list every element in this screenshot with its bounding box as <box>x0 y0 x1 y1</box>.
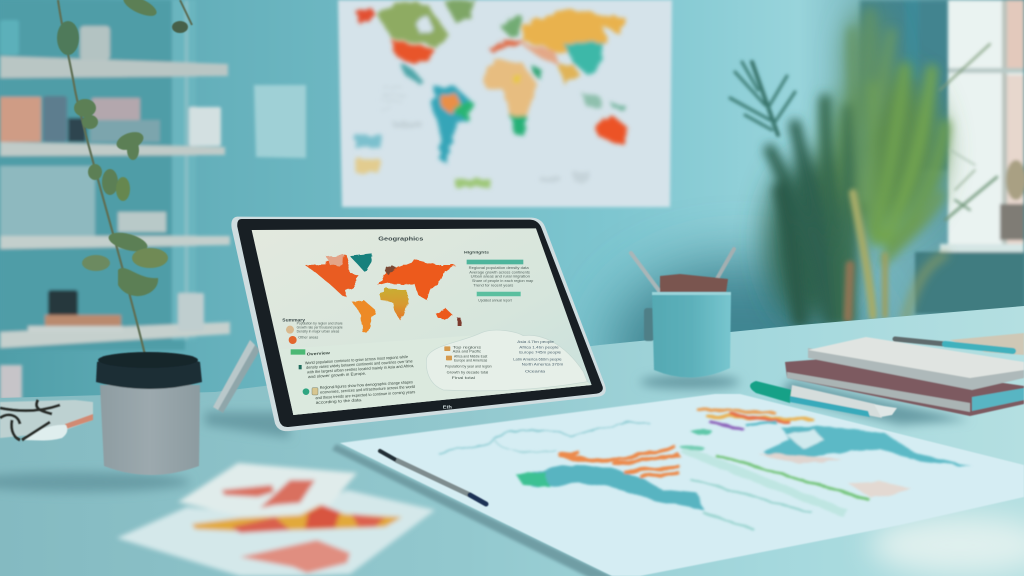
pen on paper <box>380 451 486 504</box>
mug body <box>652 293 731 378</box>
note under bar: Updated annual report <box>478 299 512 303</box>
palm fronds <box>770 12 945 320</box>
bubble text left: Top regions <box>453 345 482 349</box>
tablet silver edge <box>231 217 606 431</box>
window pot plant <box>1000 204 1024 240</box>
palm dark mass <box>766 10 943 325</box>
left legend: Other areas <box>298 335 319 339</box>
paper rainbow chart <box>698 410 813 429</box>
lower red chart <box>240 540 350 573</box>
paper curve outline <box>438 422 650 453</box>
paper green dots <box>691 429 712 434</box>
top shelf jar <box>0 20 19 55</box>
poster red USA <box>392 39 433 63</box>
shelf 3 <box>0 236 230 249</box>
poster Russia <box>523 8 627 53</box>
white book stack <box>118 212 166 232</box>
paper shadow <box>332 444 616 576</box>
glasses frame <box>0 400 60 440</box>
paper green end <box>514 472 549 487</box>
poster green Greenland <box>443 0 477 24</box>
bubble text right <box>513 340 564 373</box>
poster central America <box>400 62 425 85</box>
bubble text left: Final total <box>452 376 475 380</box>
right text block: Regional population density data <box>469 266 530 270</box>
lower left paragraph one: density varies widely between continents and countries over time <box>306 358 413 370</box>
lower box <box>0 365 22 400</box>
earbud shape <box>22 425 67 440</box>
shelf 1 <box>0 56 228 78</box>
plant leaves <box>57 0 188 296</box>
right text block: Trend for recent years <box>473 283 513 287</box>
bubble text left: Europe and Americas <box>454 359 488 363</box>
book stack <box>785 333 1024 416</box>
marker cap <box>750 381 792 403</box>
top book front <box>808 348 1024 390</box>
marker tip <box>874 404 897 417</box>
lower left paragraph two: economies, services and infrastructure across the world <box>320 384 415 395</box>
poster South America <box>431 85 473 163</box>
map South America <box>353 300 375 333</box>
small papers with charts <box>117 463 435 576</box>
poster SE Asia <box>582 93 603 110</box>
lower left paragraph two <box>315 379 416 405</box>
lower left paragraph one: with the largest urban centres located mainly in Asia and Africa, <box>307 363 414 375</box>
mug handle <box>644 308 654 341</box>
paper sheet <box>340 394 1024 576</box>
poster Europe <box>502 13 523 37</box>
lower left paragraph one: Overview <box>307 350 331 357</box>
bubble text left: Africa and Middle East <box>454 355 487 359</box>
tablet stand <box>213 340 260 413</box>
pink book stack <box>92 98 140 120</box>
left legend: Population by region and share <box>297 321 343 325</box>
map North America <box>305 255 360 297</box>
bubble text right: Latin America 660m people <box>513 358 562 362</box>
teal highlight bar two <box>477 292 521 296</box>
map Eurasia <box>378 260 455 300</box>
map Greenland <box>349 253 372 272</box>
map arctic islands <box>327 255 345 267</box>
lower left paragraph two: Regional figures show how demographic change shapes <box>320 379 413 390</box>
green tag <box>291 349 305 355</box>
top shelf pot <box>80 26 110 60</box>
palm thin fronds over window <box>940 44 997 220</box>
bubble panel <box>426 330 587 391</box>
white bottle <box>178 293 204 331</box>
pen on book <box>895 339 945 344</box>
lower left paragraph one: and slower growth in Europe. <box>308 371 366 379</box>
left legend: Growth rate per thousand people <box>297 325 343 329</box>
pen mug <box>631 249 734 378</box>
lower book cover <box>785 358 1024 416</box>
cup body <box>100 385 200 475</box>
poster middle east <box>520 43 560 65</box>
cup lid <box>96 354 202 389</box>
wall shadow near desk <box>610 260 870 440</box>
orange framed print <box>0 97 41 142</box>
screen title: Geographics <box>378 236 423 242</box>
paper orange stripes <box>560 447 680 477</box>
left legend <box>282 318 343 344</box>
left cup with lid <box>96 352 202 475</box>
window <box>915 0 1024 314</box>
paper blue landmass upper <box>763 427 972 467</box>
icon dots <box>299 365 302 369</box>
left legend: Summary <box>282 318 306 323</box>
glasses and notebook <box>0 400 93 440</box>
palm left frond <box>730 62 795 135</box>
plant stem <box>58 0 145 355</box>
wall background <box>0 0 1024 400</box>
tablet screen <box>252 228 592 415</box>
poster China <box>563 42 603 75</box>
right text block: Urban areas and rural migration <box>471 275 530 279</box>
pink brick panes <box>1007 0 1024 68</box>
top right heading: Highlights <box>464 250 490 255</box>
paper green line long <box>684 450 846 513</box>
large paper map <box>332 394 1024 576</box>
dark wall column <box>860 0 950 170</box>
spoon left <box>631 253 660 292</box>
poster green Canada <box>377 2 450 47</box>
map Scandinavia <box>384 265 397 275</box>
yellow red chart <box>192 505 402 531</box>
red chart <box>222 485 274 497</box>
lower wall under window <box>915 252 1024 314</box>
speckled panel <box>0 166 95 236</box>
right text block: Share of people in each region map <box>472 279 533 283</box>
tablet <box>231 217 606 431</box>
left legend: Density in major urban areas <box>297 329 340 333</box>
spoon right <box>706 249 734 298</box>
bubble text left: Asia and Pacific <box>453 349 481 353</box>
right text block: Average growth across continents <box>469 270 530 274</box>
bubble text right: Asia 4.7bn people <box>517 340 554 344</box>
wall poster: world map <box>338 0 672 207</box>
palm stems <box>848 193 885 318</box>
map dark island <box>457 318 461 325</box>
tablet black bezel <box>237 219 603 427</box>
wall note <box>254 85 306 158</box>
lower panel <box>279 333 592 415</box>
bubble text left <box>444 345 492 380</box>
poster Australia <box>597 116 628 147</box>
shelf 2 <box>0 142 225 156</box>
back paper <box>178 463 357 517</box>
paper blue landmass lower <box>532 463 704 510</box>
bubble text right: Africa 1.4bn people <box>519 345 559 349</box>
bubble text left: Population by year and region <box>445 365 492 369</box>
bubble text right: Europe 745m people <box>519 350 561 354</box>
far notebook <box>950 333 1024 355</box>
teal highlight bar <box>467 260 523 264</box>
front paper <box>117 490 435 576</box>
paper faint bars <box>848 482 911 498</box>
left shelving unit <box>0 0 230 400</box>
right text block <box>469 266 533 287</box>
palm plant <box>730 10 997 325</box>
map Africa <box>378 288 408 320</box>
bubble text right: Oceania <box>525 369 545 373</box>
shelf 4 <box>0 322 230 348</box>
desk <box>0 306 1024 576</box>
poster legend green <box>455 179 490 187</box>
top book cover <box>808 337 1024 378</box>
lower left paragraph one <box>304 345 415 379</box>
desk highlight <box>870 515 1024 575</box>
white box on shelf <box>189 107 221 146</box>
poster India <box>557 63 580 87</box>
hanging plant <box>57 0 192 355</box>
poster legend blue <box>355 135 382 148</box>
bubble text left: Growth by decade total <box>447 370 489 374</box>
striped box <box>43 96 67 142</box>
lower book teal edge <box>972 388 1024 411</box>
lower left paragraph two: according to the data. <box>315 397 362 405</box>
lower left paragraph two: and these trends are expected to continue in coming years <box>315 389 415 400</box>
lower left paragraph one: World population continues to grow across most regions while <box>305 354 409 365</box>
poster red Alaska <box>357 8 376 23</box>
bubble text right: North America 370m <box>522 363 564 367</box>
mug contents <box>660 274 728 295</box>
poster caption <box>380 87 590 182</box>
lower book pages <box>787 372 970 412</box>
desk shadows <box>0 375 970 492</box>
marker body <box>790 385 882 418</box>
tablet map <box>305 253 461 333</box>
poster legend yellow <box>356 159 380 173</box>
poster Africa <box>483 58 537 117</box>
map Australia <box>436 308 453 319</box>
bezel logo: Eth <box>443 404 452 409</box>
black object and orange books <box>48 290 78 316</box>
marker <box>750 381 897 418</box>
